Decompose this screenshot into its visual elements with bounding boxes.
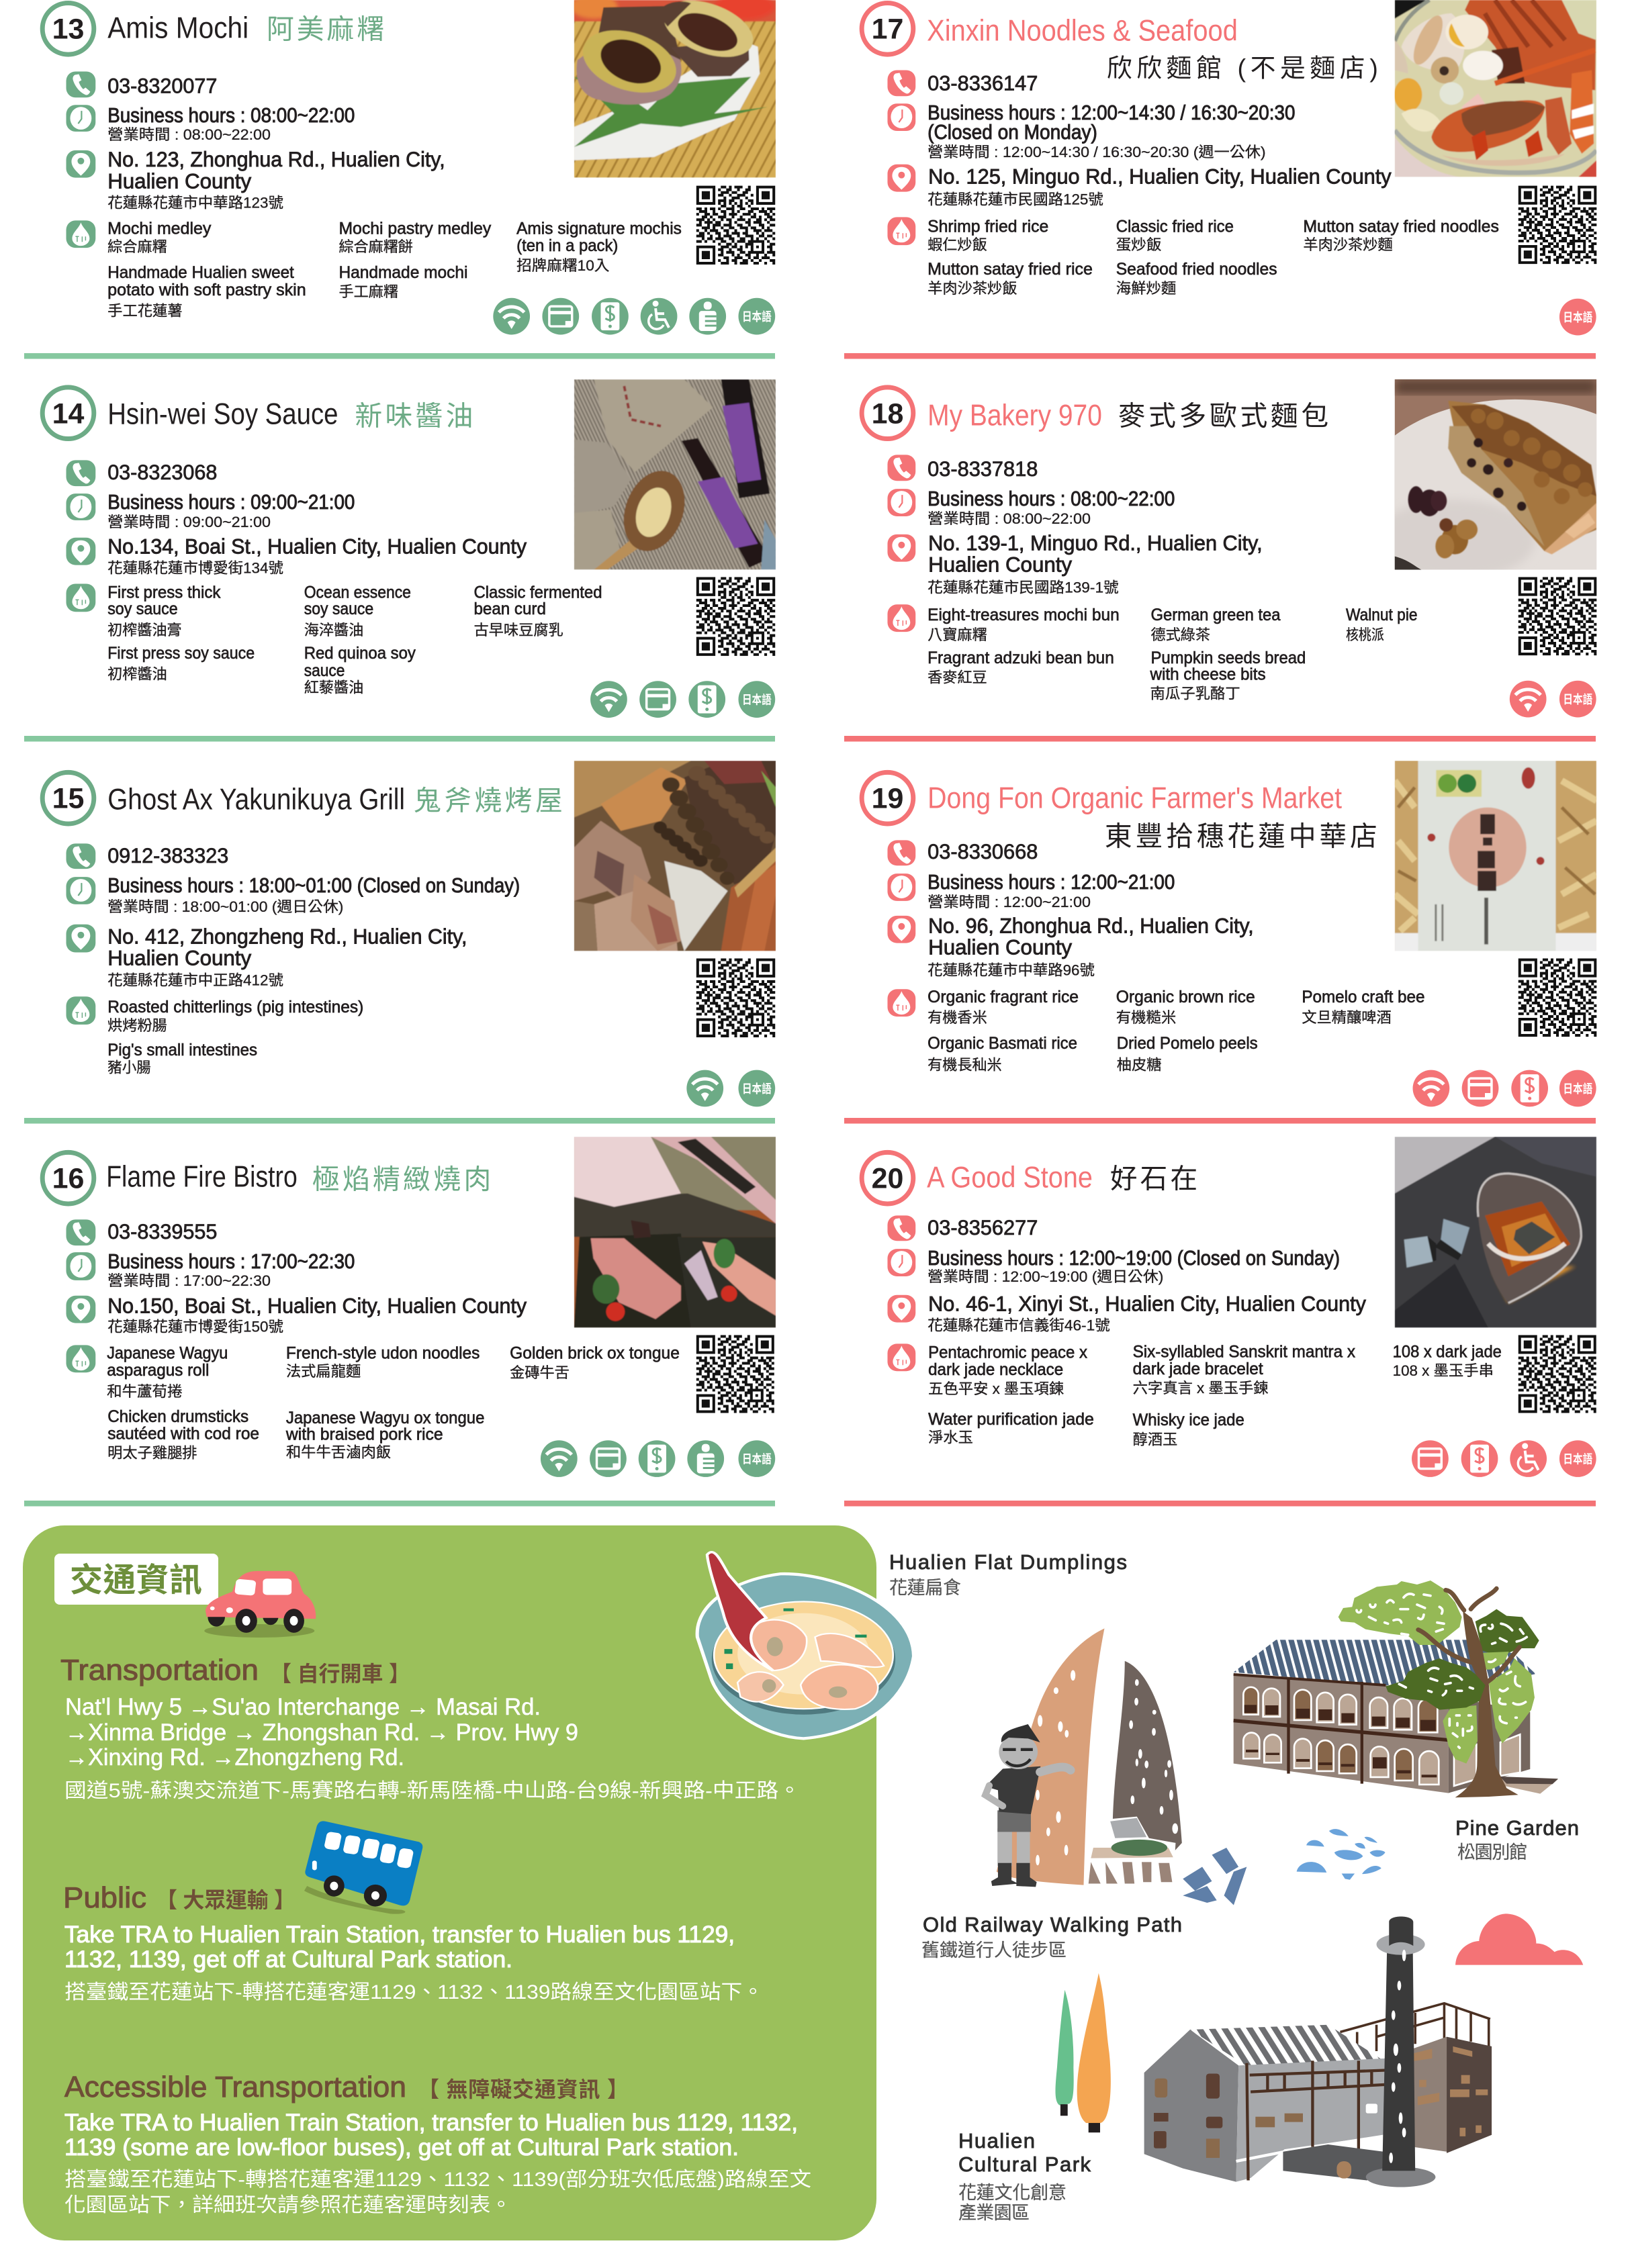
shop name: A Good Stone	[927, 1161, 1093, 1194]
shop name: My Bakery 970	[927, 399, 1102, 432]
text: accessible route: Take TRA to Hualien Train Station, transfer to Hualien bus 1129, 1132,	[64, 2110, 798, 2136]
business hours row: 營業時間 : 08:00~22:00	[927, 510, 1091, 527]
address row	[887, 531, 1263, 596]
menu items: 八寶麻糬	[927, 626, 987, 643]
menu items: 手工麻糬	[338, 283, 398, 300]
menu items: Pomelo craft bee	[1302, 988, 1424, 1006]
shop number 17	[862, 3, 913, 54]
shop name: 新味醬油	[355, 401, 473, 432]
menu items	[887, 604, 1417, 702]
shop number 18: 18	[872, 398, 903, 430]
menu items: 古早味豆腐乳	[473, 622, 563, 639]
photo: whisky with jade cube	[1394, 1137, 1597, 1328]
QR code	[696, 579, 775, 655]
shop number 13	[42, 3, 94, 54]
label: Hualien Cultural Park: Cultural Park	[958, 2153, 1091, 2176]
business hours row: 營業時間 : 09:00~21:00	[107, 514, 271, 530]
menu items: 108 x 墨玉手串	[1393, 1362, 1494, 1379]
address row: No. 96, Zhonghua Rd., Hualien City,	[928, 914, 1254, 938]
menu items: potato with soft pastry skin	[107, 281, 306, 299]
heading: public transit: Public	[63, 1881, 146, 1914]
heading: self drive: Transportation	[60, 1654, 259, 1687]
address row: Hualien County	[928, 935, 1072, 959]
shop number 19	[862, 772, 913, 824]
menu items: Mochi pastry medley	[338, 219, 492, 238]
text: public transit route: 1132, 1139, get off at Cultural Park station.	[64, 1946, 512, 1973]
shop name	[927, 399, 1328, 432]
business hours row: (Closed on Monday)	[927, 120, 1097, 144]
service badges	[1413, 1070, 1596, 1106]
phone row: 03-8337818	[927, 457, 1038, 481]
heading: accessible transit: 【 無障礙交通資訊 】	[418, 2077, 629, 2101]
label: Old Railway Walking Path: 舊鐵道行人徒步區	[921, 1940, 1067, 1960]
shop number 20: 20	[872, 1163, 903, 1195]
panel: shop 19 Dong Fon Organic Farmer's Market	[862, 761, 1596, 1106]
menu items: 六字真言 x 墨玉手鍊	[1133, 1380, 1269, 1397]
shop name	[106, 1160, 491, 1195]
shop name: 好石在	[1110, 1164, 1197, 1194]
menu items: Pig's small intestines	[107, 1041, 257, 1059]
shop name: Dong Fon Organic Farmer's Market	[927, 782, 1343, 815]
menu items	[887, 217, 1499, 297]
menu items: 手工花蓮薯	[107, 303, 183, 320]
address row: No. 125, Minguo Rd., Hualien City, Hualien County	[928, 164, 1392, 189]
business hours row: 營業時間 : 08:00~22:00	[107, 126, 271, 143]
text: public transit route	[64, 1922, 764, 2003]
shop number 15	[42, 772, 94, 824]
address row: No. 412, Zhongzheng Rd., Hualien City,	[107, 925, 467, 949]
service badges: 日本語	[1563, 1453, 1592, 1466]
phone row: 03-8339555	[107, 1219, 217, 1243]
panel: shop 14 Hsin-wei Soy Sauce	[42, 379, 776, 718]
phone row	[887, 455, 1038, 481]
shop number 19: 19	[872, 783, 903, 815]
service badges	[541, 1440, 775, 1477]
menu items: Pumpkin seeds bread	[1150, 649, 1306, 667]
phone row: 03-8323068	[107, 460, 217, 484]
label: Old Railway Walking Path: Old Railway Walking Path	[923, 1913, 1182, 1936]
menu items: 香麥紅豆	[927, 669, 987, 686]
phone row	[66, 71, 217, 97]
menu items: First press soy sauce	[107, 644, 255, 663]
panel: shop 13 Amis Mochi	[42, 0, 776, 334]
business hours row	[66, 873, 520, 915]
menu items: 淨水玉	[928, 1429, 973, 1446]
text: public transit route: Take TRA to Hualien Train Station, transfer to Hualien bus 1129,	[64, 1922, 735, 1948]
icon: blue bus	[304, 1821, 422, 1914]
address row	[887, 1292, 1366, 1334]
address row: Hualien County	[107, 945, 251, 970]
business hours row	[66, 490, 355, 530]
heading: public transit	[63, 1881, 296, 1914]
menu items: Organic fragrant rice	[927, 988, 1079, 1006]
address row	[887, 164, 1392, 207]
address row: 花蓮縣花蓮市民國路125號	[927, 191, 1103, 207]
menu items: 紅藜醬油	[304, 679, 363, 696]
menu items: Dried Pomelo peels	[1117, 1034, 1258, 1053]
menu items: Shrimp fried rice	[927, 217, 1048, 236]
illustration: Hualien Cultural Park	[1055, 1913, 1583, 2187]
menu items: 五色平安 x 墨玉項鍊	[928, 1380, 1064, 1397]
menu items: 烘烤粉腸	[107, 1017, 167, 1034]
phone row	[66, 1219, 217, 1245]
photo: soy sauce bottles	[574, 379, 776, 569]
illustration: Pine Garden building and tree	[1234, 1580, 1558, 1797]
shop name	[927, 1161, 1197, 1194]
shop number 17: 17	[872, 13, 903, 46]
address row: Hualien County	[107, 169, 251, 193]
menu items: 法式扁龍麵	[286, 1363, 361, 1380]
address row: 花蓮縣花蓮市博愛街150號	[107, 1319, 283, 1335]
menu items: 和牛牛舌滷肉飯	[286, 1444, 391, 1461]
menu items: with cheese bits	[1150, 665, 1266, 684]
shop number 14	[42, 387, 94, 439]
address row	[66, 534, 527, 577]
menu items: 醇酒玉	[1133, 1431, 1177, 1448]
menu items: Mutton satay fried noodles	[1303, 217, 1499, 236]
photo: seafood pot	[1394, 0, 1597, 177]
QR code	[696, 1336, 774, 1411]
business hours row: Business hours : 12:00~21:00	[927, 870, 1175, 894]
shop name: Xinxin Noodles & Seafood	[927, 14, 1238, 48]
shop name: 鬼斧燒烤屋	[414, 786, 563, 816]
address row: 花蓮縣花蓮市博愛街134號	[107, 560, 283, 577]
panel: shop 17 Xinxin Noodles and Seafood	[862, 0, 1596, 335]
text: accessible route: 化園區站下，詳細班次請參照花蓮客運時刻表。	[64, 2194, 512, 2216]
menu items: 初榨醬油	[107, 666, 167, 683]
photo: organic rice bag	[1394, 761, 1597, 951]
label: Hualien Cultural Park: 產業園區	[958, 2203, 1030, 2223]
service badges: 日本語	[1563, 1082, 1592, 1096]
menu items: Classic fermented	[473, 583, 602, 602]
service badges: 日本語	[742, 1453, 772, 1466]
text: accessible route: 1139 (some are low-floor buses), get off at Cultural Park station.	[64, 2134, 739, 2161]
shop name: 極焰精緻燒肉	[312, 1164, 491, 1195]
label: Hualien Cultural Park: 花蓮文化創意	[958, 2183, 1067, 2203]
menu items: 綜合麻糬	[107, 238, 167, 255]
address row: No.134, Boai St., Hualien City, Hualien County	[107, 534, 527, 559]
photo: grilled skewers	[574, 761, 776, 951]
menu items: Water purification jade	[928, 1410, 1094, 1429]
address row: No. 46-1, Xinyi St., Hualien City, Hualien County	[928, 1292, 1366, 1316]
label: Hualien Flat Dumplings: Hualien Flat Dumplings	[889, 1550, 1127, 1574]
shop name: 麥式多歐式麵包	[1118, 401, 1328, 432]
illustration: old railway walking path	[985, 1628, 1386, 1909]
menu items: bean curd	[473, 600, 546, 618]
illustration: flat dumpling bowl	[697, 1552, 914, 1738]
menu items: 海淬醬油	[304, 622, 363, 639]
shop name	[927, 782, 1377, 851]
heading: accessible transit	[64, 2071, 629, 2104]
menu items: 有機香米	[927, 1009, 987, 1026]
menu items: sautéed with cod roe	[107, 1425, 259, 1444]
menu items	[66, 219, 682, 320]
business hours row: 營業時間 : 12:00~21:00	[927, 894, 1091, 910]
label: Old Railway Walking Path	[921, 1913, 1182, 1960]
photo: mochi	[574, 0, 776, 178]
business hours row	[887, 487, 1175, 527]
menu items: Japanese Wagyu	[107, 1343, 228, 1362]
menu items	[66, 1343, 680, 1462]
heading: self drive: 【 自行開車 】	[270, 1662, 410, 1686]
business hours row: 營業時間 : 12:00~19:00 (週日公休)	[927, 1268, 1163, 1285]
shop name: Amis Mochi	[107, 11, 248, 45]
label: Hualien Cultural Park	[958, 2129, 1091, 2223]
service badges: 日本語	[742, 310, 772, 324]
text: public transit route: 搭臺鐵至花蓮站下-轉搭花蓮客運1129、1132、1139路線至文化園區站下。	[64, 1981, 764, 2003]
service badges	[590, 681, 775, 718]
business hours row: Business hours : 17:00~22:30	[107, 1249, 355, 1273]
menu items: Mochi medley	[107, 219, 212, 238]
business hours row	[66, 1249, 355, 1289]
phone row: 03-8336147	[927, 70, 1038, 95]
menu items: Whisky ice jade	[1133, 1411, 1244, 1429]
menu items: 綜合麻糬餅	[338, 238, 413, 255]
menu items: First press thick	[107, 583, 221, 602]
heading: self drive	[60, 1654, 410, 1687]
business hours row	[887, 101, 1295, 160]
address row: No. 139-1, Minguo Rd., Hualien City,	[928, 531, 1263, 555]
menu items: 德式綠茶	[1150, 626, 1210, 643]
menu items	[66, 583, 602, 696]
photo: walnut pie	[1394, 379, 1597, 569]
menu items: 豬小腸	[107, 1059, 151, 1076]
panel: shop 16 Flame Fire Bistro	[42, 1137, 776, 1477]
menu items: 金磚牛舌	[510, 1364, 570, 1381]
shop name: Flame Fire Bistro	[106, 1160, 298, 1194]
address row: 花蓮縣花蓮市信義街46-1號	[927, 1317, 1110, 1334]
QR code	[696, 187, 775, 263]
business hours row: Business hours : 08:00~22:00	[107, 103, 355, 127]
photo: wagyu beef	[574, 1137, 776, 1328]
heading tab	[54, 1554, 218, 1605]
menu items: 羊肉沙茶炒麵	[1303, 236, 1393, 253]
shop name	[107, 11, 384, 45]
service badges: 日本語	[742, 1082, 772, 1096]
heading: public transit: 【 大眾運輸 】	[156, 1888, 296, 1912]
shop name	[927, 14, 1378, 83]
menu items: 有機糙米	[1116, 1009, 1176, 1026]
menu items: Ocean essence	[304, 583, 411, 602]
menu items: sauce	[304, 661, 345, 680]
menu items: Pentachromic peace x	[928, 1343, 1088, 1362]
label: Pine Garden: Pine Garden	[1455, 1816, 1579, 1840]
menu items	[887, 988, 1424, 1074]
label: Hualien Flat Dumplings: 花蓮扁食	[889, 1578, 961, 1598]
menu items: Handmade Hualien sweet	[107, 263, 294, 282]
heading: accessible transit: Accessible Transportation	[64, 2071, 406, 2104]
text: driving route	[64, 1694, 801, 1802]
service badges	[1412, 1440, 1596, 1477]
heading tab: 交通資訊	[70, 1562, 202, 1599]
business hours row: Business hours : 12:00~14:30 / 16:30~20:30	[927, 101, 1295, 124]
address row	[66, 147, 445, 211]
business hours row	[887, 870, 1175, 910]
panel: shop 18 My Bakery 970	[862, 379, 1632, 717]
QR code	[1518, 960, 1596, 1035]
service badges	[686, 1070, 775, 1106]
icon: red car	[204, 1571, 316, 1638]
address row: No. 123, Zhonghua Rd., Hualien City,	[107, 147, 445, 171]
phone row	[66, 460, 217, 486]
menu items: soy sauce	[304, 600, 373, 618]
shop number 16	[42, 1152, 94, 1204]
menu items	[887, 1342, 1502, 1448]
address row	[887, 914, 1254, 978]
address row: 花蓮縣花蓮市中正路412號	[107, 972, 283, 988]
menu items: 海鮮炒麵	[1116, 280, 1176, 297]
menu items: Chicken drumsticks	[107, 1407, 248, 1426]
menu items: Eight-treasures mochi bun	[927, 606, 1120, 624]
business hours row: 營業時間 : 12:00~14:30 / 16:30~20:30 (週一公休)	[927, 144, 1266, 160]
business hours row	[66, 103, 355, 143]
menu items: 柚皮糖	[1117, 1057, 1161, 1074]
shop number 20	[862, 1152, 913, 1204]
menu items: with braised pork rice	[285, 1425, 443, 1444]
service badges	[1559, 299, 1596, 335]
business hours row: Business hours : 18:00~01:00 (Closed on Sunday)	[107, 873, 520, 897]
menu items: 108 x dark jade	[1393, 1342, 1502, 1361]
business hours row	[887, 1246, 1340, 1285]
phone row	[887, 839, 1038, 865]
menu items: dark jade bracelet	[1133, 1360, 1263, 1378]
address row: No.150, Boai St., Hualien City, Hualien County	[107, 1294, 527, 1318]
phone row: 03-8320077	[107, 73, 217, 97]
business hours row: 營業時間 : 17:00~22:30	[107, 1272, 271, 1289]
phone row: 0912-383323	[107, 843, 228, 867]
menu items: 初榨醬油膏	[107, 622, 182, 639]
shop name: Hsin-wei Soy Sauce	[107, 397, 338, 431]
QR code	[696, 960, 775, 1036]
menu items: Japanese Wagyu ox tongue	[286, 1409, 484, 1427]
business hours row: Business hours : 09:00~21:00	[107, 490, 355, 514]
phone row	[66, 843, 228, 869]
business hours row: Business hours : 12:00~19:00 (Closed on Sunday)	[927, 1246, 1340, 1270]
menu items: Mutton satay fried rice	[927, 260, 1093, 279]
menu items: soy sauce	[107, 600, 178, 618]
label: Hualien Cultural Park: Hualien	[958, 2129, 1035, 2153]
service badges: 日本語	[1563, 693, 1592, 706]
service badges	[493, 298, 775, 334]
menu items: Six-syllabled Sanskrit mantra x	[1133, 1342, 1356, 1361]
shop number 13: 13	[52, 13, 84, 46]
QR code	[1518, 187, 1596, 263]
menu items: Red quinoa soy	[304, 644, 416, 663]
phone row: 03-8330668	[927, 839, 1038, 863]
address row: Hualien County	[928, 553, 1072, 577]
text: accessible route	[64, 2110, 811, 2216]
phone row	[887, 70, 1038, 96]
panel: transportation information	[23, 1525, 876, 2240]
label: Hualien Flat Dumplings	[889, 1550, 1127, 1598]
text: driving route: →Xinma Bridge → Zhongshan Rd. → Prov. Hwy 9	[65, 1719, 578, 1746]
label: Pine Garden: 松園別館	[1457, 1842, 1527, 1862]
menu items: Handmade mochi	[338, 263, 468, 282]
QR code	[1518, 579, 1596, 654]
menu items: 南瓜子乳酪丁	[1150, 686, 1240, 702]
menu items: (ten in a pack)	[516, 236, 618, 255]
menu items: Golden brick ox tongue	[510, 1343, 680, 1362]
shop name: 阿美麻糬	[267, 14, 384, 45]
shop number 16: 16	[52, 1163, 84, 1195]
phone row	[887, 1215, 1038, 1241]
shop name: Ghost Ax Yakunikuya Grill	[107, 783, 405, 816]
address row: 花蓮縣花蓮市中華路96號	[927, 961, 1095, 978]
panel: shop 20 A Good Stone	[862, 1137, 1596, 1477]
text: driving route: Nat'l Hwy 5 →Su'ao Interchange → Masai Rd.	[65, 1694, 541, 1720]
QR code	[1518, 1336, 1596, 1411]
menu items: Organic brown rice	[1116, 988, 1255, 1006]
service badges: 日本語	[1563, 311, 1592, 324]
menu items: 招牌麻糬10入	[516, 257, 610, 274]
menu items: 蛋炒飯	[1116, 236, 1162, 253]
menu items: 蝦仁炒飯	[927, 236, 987, 253]
menu items: Seafood fried noodles	[1116, 260, 1277, 279]
shop name: 東豐拾穗花蓮中華店	[1105, 820, 1377, 851]
menu items: 核桃派	[1346, 626, 1384, 643]
shop number 15: 15	[52, 783, 84, 815]
menu items: 明太子雞腿排	[107, 1445, 197, 1462]
shop name: 欣欣麵館 (不是麵店)	[1107, 54, 1378, 83]
panel: shop 15 Ghost Ax Yakunikuya Grill	[42, 761, 776, 1106]
service badges	[1510, 681, 1596, 717]
menu items: Roasted chitterlings (pig intestines)	[107, 998, 363, 1017]
menu items: Organic Basmati rice	[927, 1034, 1077, 1053]
address row	[66, 1294, 527, 1335]
menu items: 和牛蘆荀捲	[107, 1383, 183, 1400]
address row	[66, 925, 467, 988]
shop number 18	[862, 387, 913, 439]
address row: 花蓮縣花蓮市中華路123號	[107, 194, 283, 211]
menu items	[66, 996, 363, 1076]
shop number 14: 14	[52, 398, 85, 430]
phone row: 03-8356277	[927, 1215, 1038, 1239]
text: driving route: 國道5號-蘇澳交流道下-馬賽路右轉-新馬陸橋-中山路-台9線-新興路-中正路。	[64, 1780, 801, 1802]
text: accessible route: 搭臺鐵至花蓮站下-轉搭花蓮客運1129、1132、1139(部分班次低底盤)路線至文	[64, 2169, 811, 2191]
label: Pine Garden	[1455, 1816, 1579, 1862]
menu items: 文旦精釀啤酒	[1302, 1009, 1392, 1026]
address row: 花蓮縣花蓮市民國路139-1號	[927, 579, 1119, 596]
text: driving route: →Xinxing Rd. →Zhongzheng Rd.	[65, 1744, 404, 1770]
service badges: 日本語	[742, 694, 772, 707]
menu items: asparagus roll	[107, 1361, 209, 1380]
business hours row: 營業時間 : 18:00~01:00 (週日公休)	[107, 898, 343, 915]
business hours row: Business hours : 08:00~22:00	[927, 487, 1175, 510]
menu items: dark jade necklace	[928, 1360, 1063, 1379]
menu items: Amis signature mochis	[516, 219, 682, 238]
menu items: French-style udon noodles	[286, 1343, 480, 1362]
menu items: 羊肉沙茶炒飯	[927, 280, 1017, 297]
menu items: Walnut pie	[1346, 606, 1418, 624]
menu items: 有機長秈米	[927, 1057, 1002, 1074]
menu items: Fragrant adzuki bean bun	[927, 649, 1114, 667]
menu items: Classic fried rice	[1116, 217, 1234, 236]
menu items: German green tea	[1150, 606, 1281, 624]
